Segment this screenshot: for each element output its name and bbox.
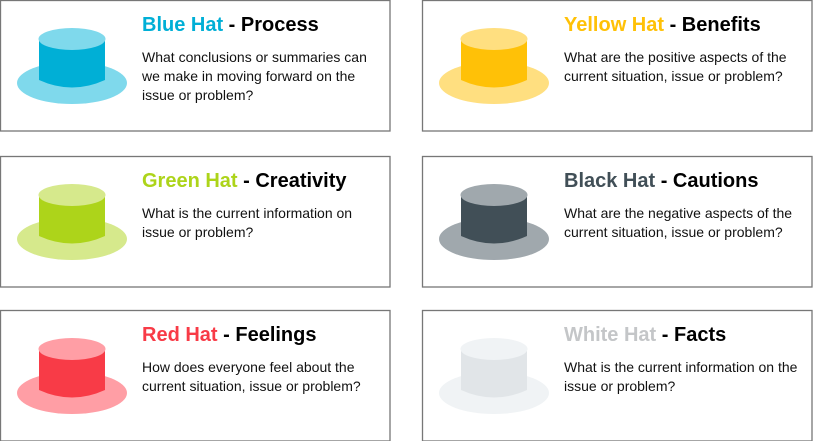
heading: blue hat: Blue Hat - Process [142,14,319,36]
panel: green hat [0,156,390,287]
heading: yellow hat: Yellow Hat - Benefits [564,14,761,36]
text: blue hat question: What conclusions or summaries can [142,49,367,65]
text: black hat question: What are the negative aspects of the [564,205,792,221]
panel: blue hat [0,0,390,131]
text: white hat question: issue or problem? [564,378,675,394]
text: green hat question: issue or problem? [142,224,253,240]
icon: green hat [17,184,127,260]
text: yellow hat question: What are the positive aspects of the [564,49,787,65]
panel: black hat [422,156,812,287]
icon: blue hat [17,28,127,104]
heading: red hat: Red Hat - Feelings [142,324,316,346]
panel: yellow hat [422,0,812,131]
icon: white hat [439,338,549,414]
text: blue hat question: we make in moving forward on the [141,68,355,84]
icon: yellow hat [439,28,549,104]
text: yellow hat question: current situation, issue or problem? [564,68,783,84]
text: red hat question: How does everyone feel about the [142,359,355,375]
text: red hat question: current situation, issue or problem? [142,378,361,394]
text: green hat question: What is the current information on [142,205,352,221]
heading: green hat: Green Hat - Creativity [142,170,347,192]
icon: black hat [439,184,549,260]
heading: white hat: White Hat - Facts [564,324,726,346]
panel: white hat [422,310,812,441]
icon: red hat [17,338,127,414]
text: white hat question: What is the current information on the [564,359,798,375]
heading: black hat: Black Hat - Cautions [564,170,758,192]
text: blue hat question: issue or problem? [142,87,253,103]
text: black hat question: current situation, issue or problem? [564,224,783,240]
panel: red hat [0,310,390,441]
